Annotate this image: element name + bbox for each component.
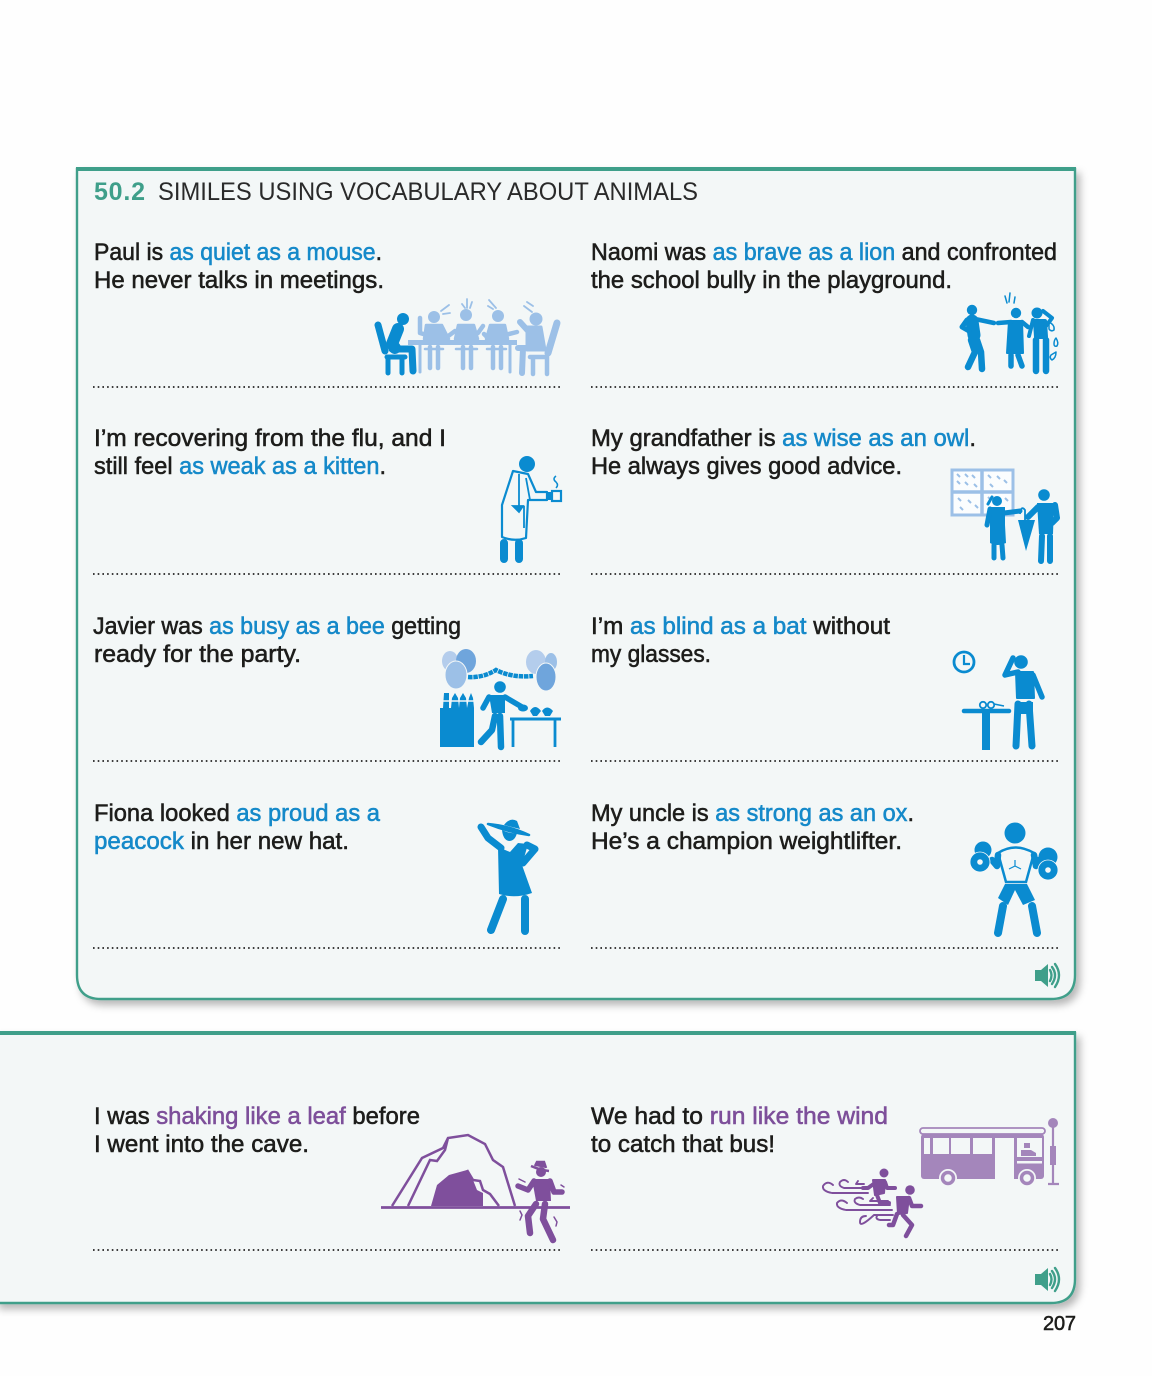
icon: people running for a bus — [823, 1118, 1059, 1236]
text: brave as a lion: Naomi was as brave as a lion and confronted — [591, 239, 1057, 266]
text: quiet as a mouse: He never talks in meetings. — [94, 267, 384, 294]
dotted line — [591, 386, 1059, 388]
text: blind as a bat — [591, 613, 890, 668]
icon: girl confronting bully — [962, 293, 1058, 371]
text: blind as a bat: I’m as blind as a bat without — [591, 613, 890, 640]
text: wise as an owl — [591, 425, 976, 480]
text: proud as a peacock: peacock in her new hat. — [94, 828, 349, 855]
page number: 207 — [1043, 1313, 1076, 1335]
text: shaking like a leaf: I was shaking like a leaf before — [94, 1103, 420, 1130]
dotted line — [93, 1249, 561, 1251]
text: blind as a bat: my glasses. — [591, 641, 711, 668]
text: brave as a lion: the school bully in the playground. — [591, 267, 952, 294]
dotted line — [591, 573, 1059, 575]
icon: man and girl with umbrella by a rainy window — [952, 470, 1057, 561]
text: proud as a peacock — [94, 800, 381, 855]
icon: audio speaker — [1035, 964, 1059, 987]
icon: weightlifter with dumbbells — [970, 822, 1058, 933]
icon: silent man at noisy meeting — [378, 299, 557, 374]
text: brave as a lion — [591, 239, 1057, 294]
icon: audio speaker — [1035, 1268, 1059, 1291]
text: weak as a kitten — [94, 425, 446, 480]
text: weak as a kitten: still feel as weak as a kitten. — [94, 453, 386, 480]
dotted line — [591, 760, 1059, 762]
text: run like the wind — [591, 1103, 888, 1158]
text: shaking like a leaf — [94, 1103, 420, 1158]
icon: man shaking outside a cave — [381, 1135, 570, 1240]
text: strong as an ox — [591, 800, 914, 855]
icon: woman in a hat — [481, 820, 535, 931]
heading: section number and title: 50.2 — [94, 178, 145, 206]
text: quiet as a mouse — [94, 239, 384, 294]
text: busy as a bee — [93, 613, 461, 668]
icon: sick person in robe with mug — [502, 456, 561, 559]
dotted line — [591, 947, 1059, 949]
text: wise as an owl: My grandfather is as wise as an owl. — [591, 425, 976, 452]
text: weak as a kitten: I’m recovering from the flu, and I — [94, 425, 446, 452]
dotted line — [591, 1249, 1059, 1251]
dotted line — [93, 947, 561, 949]
text: proud as a peacock: Fiona looked as proud as a — [94, 800, 381, 827]
panel: animal similes — [76, 167, 1076, 999]
text: busy as a bee: Javier was as busy as a bee getting — [93, 613, 461, 640]
dotted line — [93, 386, 561, 388]
text: busy as a bee: ready for the party. — [94, 641, 301, 668]
heading: section number and title: SIMILES USING VOCABULARY ABOUT ANIMALS — [158, 178, 698, 206]
text: shaking like a leaf: I went into the cave. — [94, 1131, 309, 1158]
text: run like the wind: We had to run like the wind — [591, 1103, 888, 1130]
text: wise as an owl: He always gives good advice. — [591, 453, 902, 480]
text: strong as an ox: He’s a champion weightlifter. — [591, 828, 902, 855]
text: quiet as a mouse: Paul is as quiet as a mouse. — [94, 239, 382, 266]
icon: party preparation — [440, 649, 561, 747]
icon: man searching for glasses — [954, 652, 1042, 750]
dotted line — [93, 573, 561, 575]
text: strong as an ox: My uncle is as strong as an ox. — [591, 800, 914, 827]
dotted line — [93, 760, 561, 762]
panel: other similes — [0, 1031, 1076, 1303]
text: run like the wind: to catch that bus! — [591, 1131, 775, 1158]
